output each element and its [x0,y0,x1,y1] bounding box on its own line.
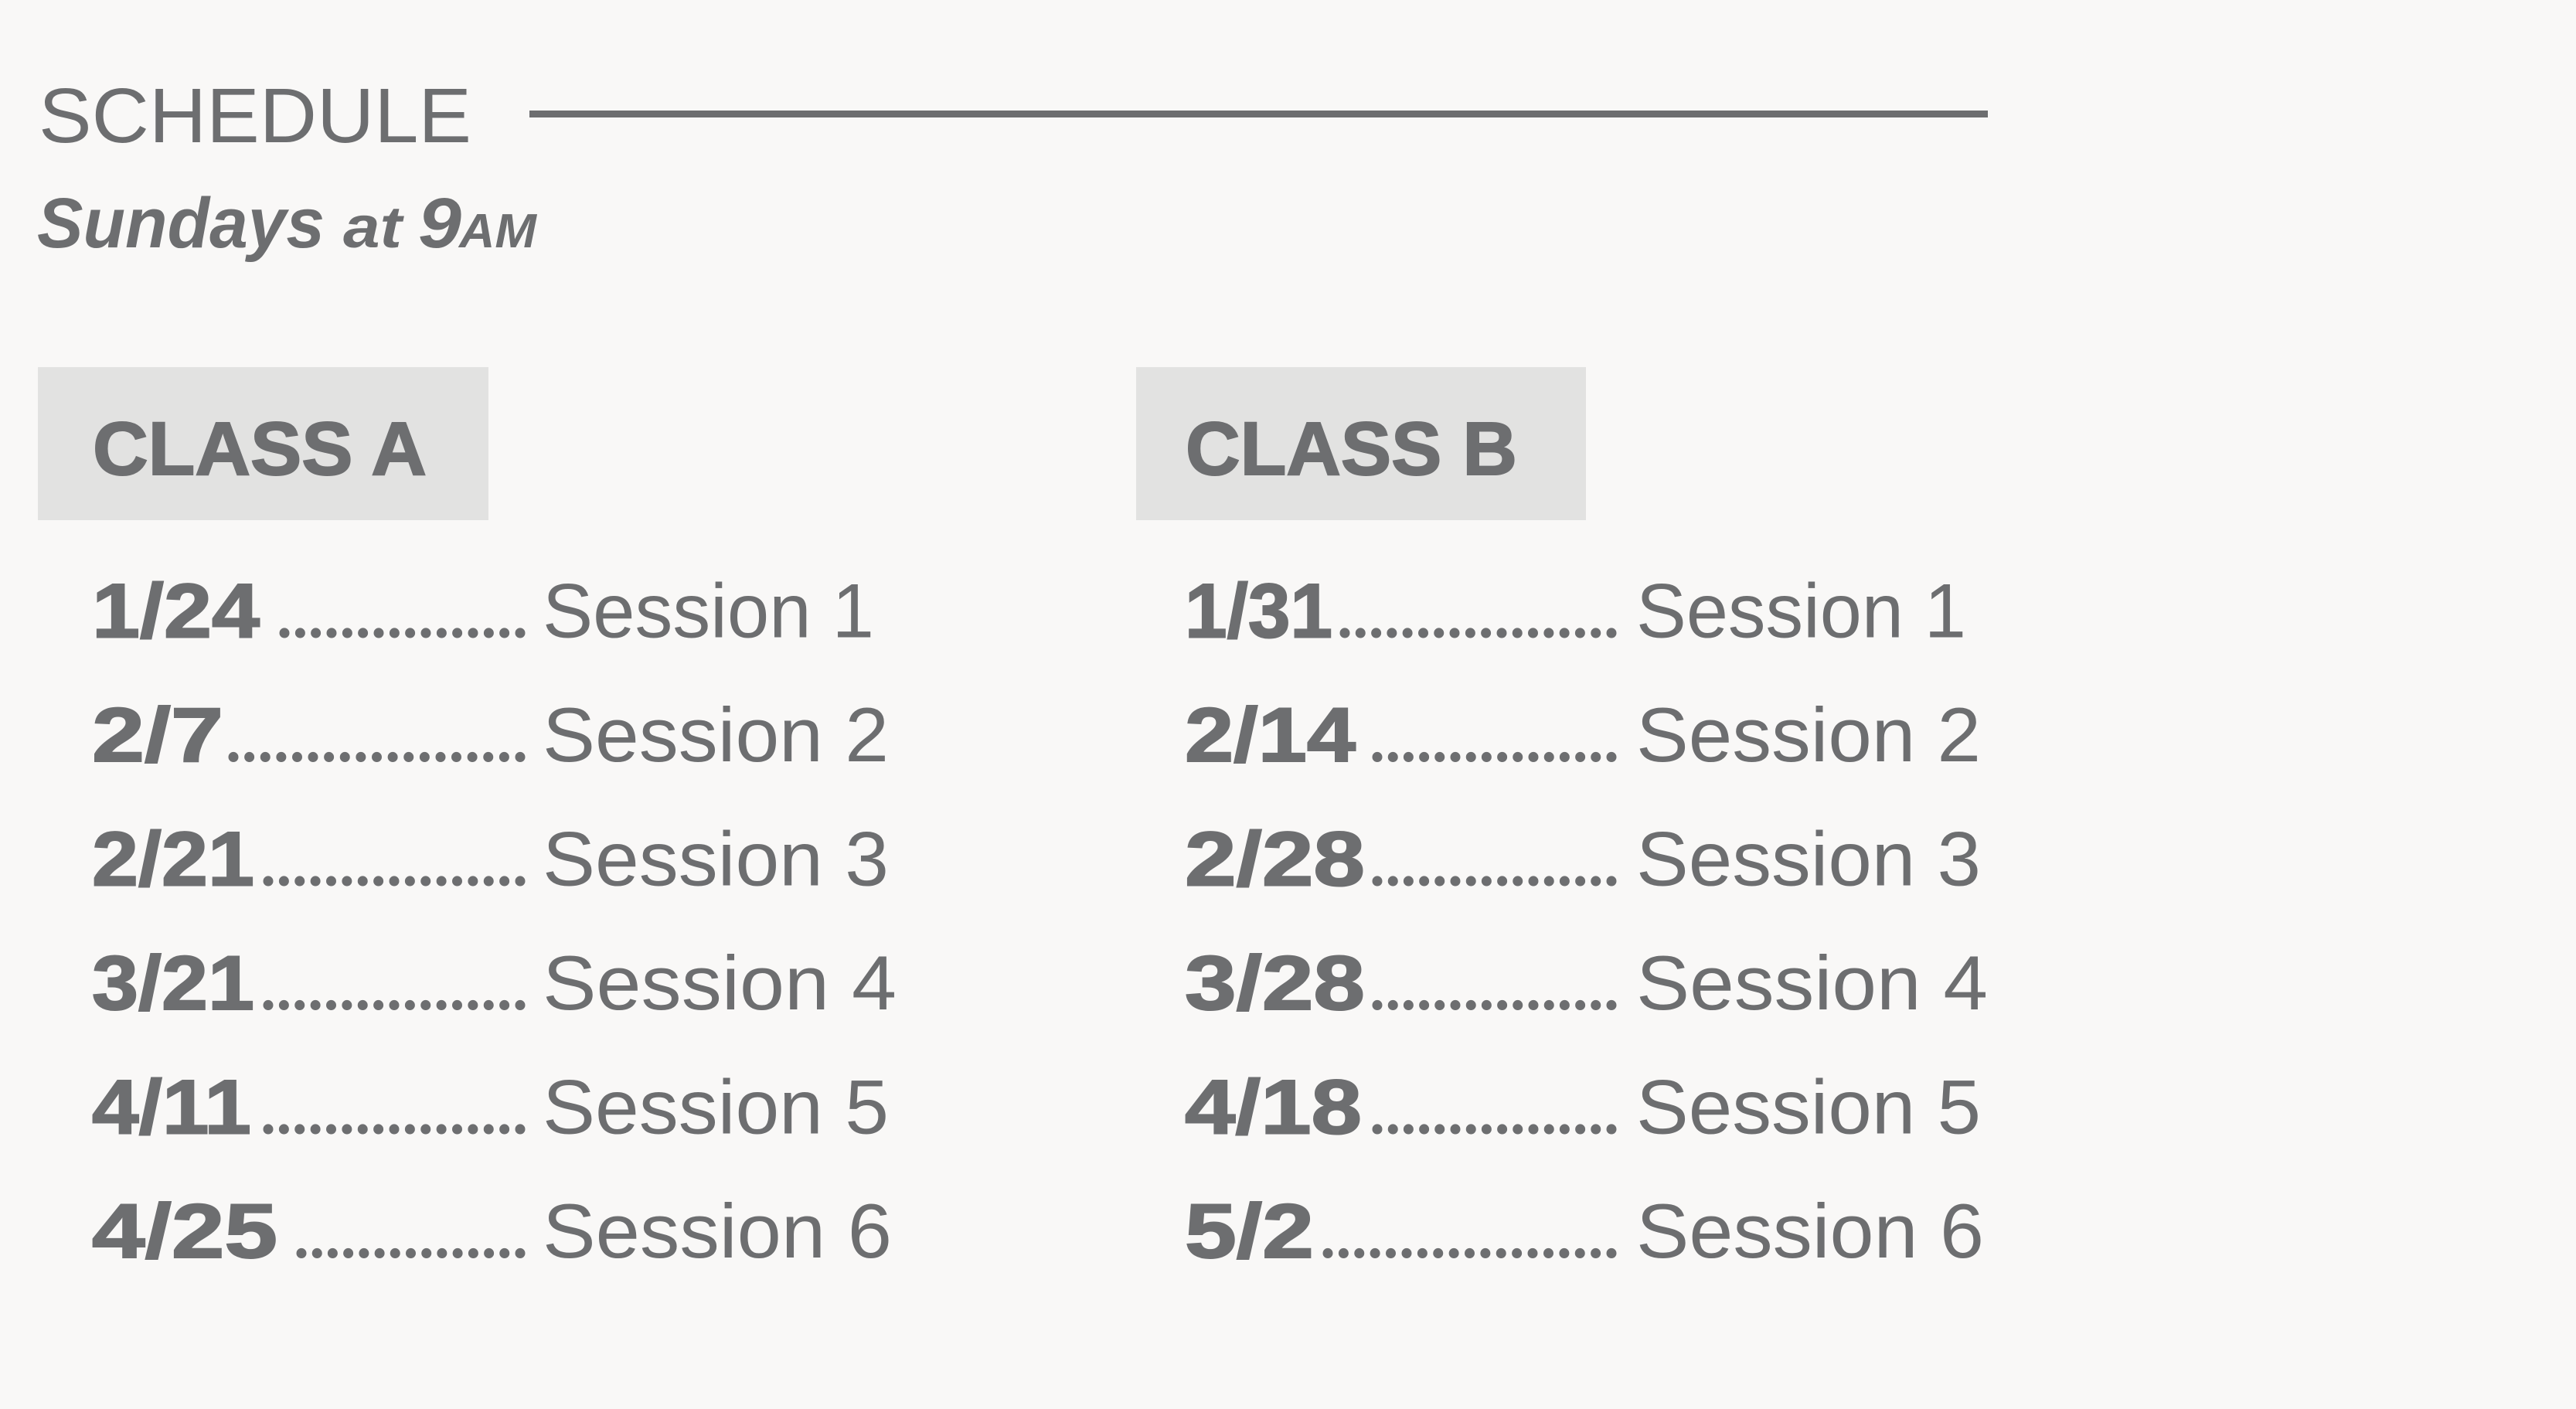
class B row 3 [1185,816,1981,901]
class B row 6 [1185,1188,1984,1274]
class B row 4: ................ [1370,955,1619,1023]
class B row 2: Session 2 [1636,692,1981,778]
class A row 6: Session 6 [543,1188,892,1274]
class B row 6: ................... [1320,1203,1619,1271]
class B row 4 [1185,940,1988,1026]
title: schedule: SCHEDULE [39,73,471,159]
class B row 3: Session 3 [1636,816,1981,901]
class B row 1: Session 1 [1636,567,1966,654]
class B row 3: ................ [1370,832,1619,900]
class B row 6: Session 6 [1636,1188,1984,1274]
class A row 6 [92,1188,892,1274]
class A row 1: Session 1 [543,567,874,654]
class A row 6: ............... [294,1203,528,1271]
class A heading: CLASS A [93,407,427,491]
class A row 3: Session 3 [543,816,889,901]
title rule [529,111,1988,117]
class A row 2: 2/7 [92,692,223,778]
class B row 2: 2/14 [1185,692,1356,778]
class A row 2: Session 2 [543,692,889,778]
class A row 4: ................. [260,955,528,1023]
class B row 1: .................. [1337,583,1619,651]
class B row 6: 5/2 [1185,1188,1314,1274]
panel: class A [38,367,897,1274]
class B row 4: Session 4 [1636,940,1988,1026]
class A row 1 [92,567,874,654]
panel: class B [1136,367,1988,1274]
class A row 6: 4/25 [92,1188,277,1274]
class B heading: CLASS B [1186,407,1517,491]
class A row 5: Session 5 [543,1064,889,1150]
class B row 2 [1185,692,1981,778]
subtitle: Sundays at 9AM: 9 [418,184,461,263]
class A row 4 [92,940,897,1026]
class A row 3 [92,816,889,901]
class A row 3: ................. [260,832,528,900]
class A row 5 [92,1064,889,1150]
class B row 5: 4/18 [1185,1064,1362,1150]
class B row 1: 1/31 [1185,567,1332,654]
class B row 1 [1185,567,1966,654]
class B row 5: Session 5 [1636,1064,1981,1150]
subtitle: Sundays at 9AM [37,184,537,263]
class A row 1: 1/24 [92,567,260,654]
class A header box [38,367,488,520]
class A row 1: ................ [277,583,528,651]
class A row 5: 4/11 [92,1064,251,1150]
class A row 4: 3/21 [92,940,254,1026]
class A row 4: Session 4 [543,940,897,1026]
class B row 5: ................ [1370,1079,1619,1147]
class B row 4: 3/28 [1185,940,1365,1026]
subtitle: Sundays at 9AM: Sundays [37,184,325,263]
class B row 3: 2/28 [1185,816,1365,901]
class A row 2: ................... [226,707,528,775]
class A row 5: ................. [260,1079,528,1147]
subtitle: Sundays at 9AM: at [343,195,404,260]
class B row 2: ................ [1370,707,1619,775]
class A row 2 [92,692,889,778]
class A row 3: 2/21 [92,816,254,901]
subtitle: Sundays at 9AM: AM [458,205,537,258]
class B header box [1136,367,1586,520]
class B row 5 [1185,1064,1981,1150]
